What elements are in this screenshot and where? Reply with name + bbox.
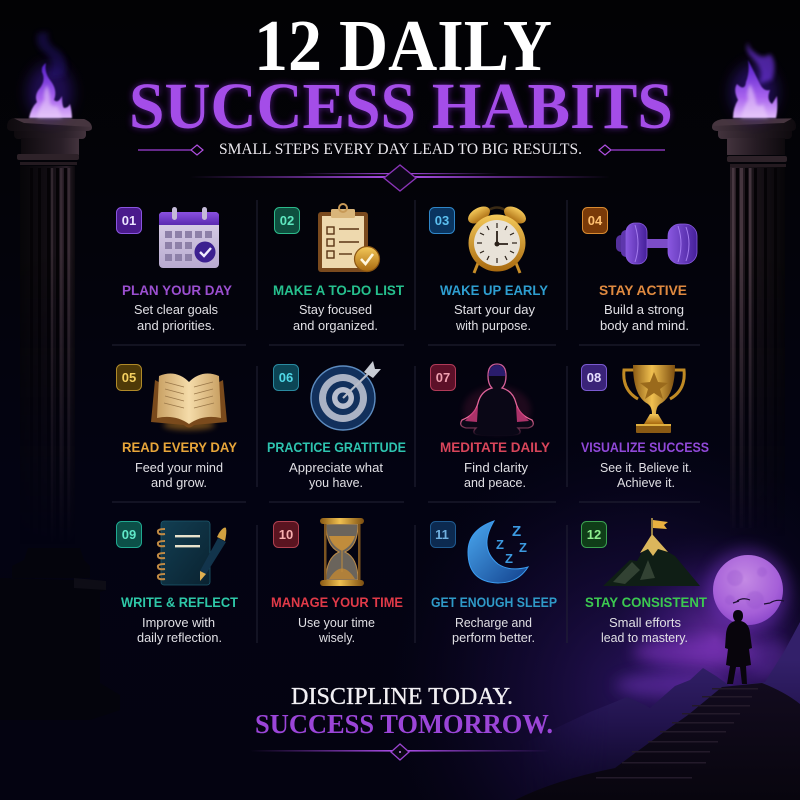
panel: habit 03 wake up early (430, 203, 548, 333)
text block (134, 303, 218, 333)
right pillar with purple flame (712, 42, 796, 536)
panel: habit 01 plan your day: 01 (122, 213, 136, 228)
text block: and grow. (151, 476, 207, 490)
text block: Appreciate what (289, 461, 384, 475)
text block (600, 461, 692, 490)
text block (289, 461, 384, 490)
text block: lead to mastery. (601, 631, 688, 645)
icon: hourglass (320, 518, 364, 586)
heading: GET ENOUGH SLEEP (431, 595, 557, 610)
title: SUCCESS HABITS (129, 70, 673, 143)
heading: WRITE & REFLECT (121, 595, 239, 610)
text block: perform better. (452, 631, 535, 645)
text block: See it. Believe it. (600, 461, 692, 475)
panel: habit 12 stay consistent (582, 518, 708, 645)
text block: Improve with (142, 616, 215, 630)
tagline with ornaments: SMALL STEPS EVERY DAY LEAD TO BIG RESULTS. (219, 141, 582, 158)
title: SUCCESS HABITS (129, 70, 673, 143)
heading: PLAN YOUR DAY (122, 283, 232, 298)
panel: habit 07 meditate daily (430, 364, 550, 490)
icon: crescent moon with Zs: Z (496, 537, 504, 552)
text block: Find clarity (464, 461, 529, 475)
title (129, 6, 673, 143)
text block: daily reflection. (137, 631, 222, 645)
panel: habit 11 get enough sleep (430, 521, 557, 645)
icon: meditating figure (461, 364, 533, 436)
heading: STAY CONSISTENT (585, 595, 708, 610)
text block: Use your time (298, 616, 375, 630)
panel: habit 09 write and reflect: 09 (122, 527, 136, 542)
heading: MEDITATE DAILY (440, 440, 550, 455)
heading: MAKE A TO-DO LIST (273, 283, 405, 298)
text block: Stay focused (299, 303, 372, 317)
text block (298, 616, 375, 645)
icon: calendar (159, 207, 219, 268)
panel: habit 06 practice gratitude (267, 361, 406, 490)
footer ornament diamond (250, 744, 550, 760)
title: 12 DAILY (254, 6, 552, 87)
text block: Small efforts (609, 616, 681, 630)
icon: crescent moon with Zs (468, 521, 528, 583)
panel: habit 08 visualize success: 08 (587, 370, 601, 385)
panel: habit 08 visualize success (581, 364, 709, 490)
panel: habit 10 manage your time (271, 518, 403, 645)
panel: habit 01 plan your day (116, 207, 232, 333)
panel: habit 09 write and reflect (116, 521, 239, 645)
text block: and peace. (464, 476, 526, 490)
panel: habit 11 get enough sleep: 11 (435, 527, 449, 542)
left pillar with purple flame (0, 32, 120, 720)
icon: target with arrow (311, 361, 381, 430)
text block: body and mind. (600, 319, 689, 333)
text block (464, 461, 529, 490)
text block: with purpose. (455, 319, 531, 333)
panel: habit 04 stay active: 04 (588, 213, 603, 228)
text block (600, 303, 689, 333)
text block: Recharge and (455, 616, 532, 630)
panel: habit 03 wake up early: 03 (435, 213, 449, 228)
heading: WAKE UP EARLY (440, 283, 548, 298)
panel: habit 10 manage your time: 10 (279, 527, 293, 542)
icon: clipboard (318, 204, 380, 272)
heading: STAY ACTIVE (599, 283, 687, 298)
grid dividers (112, 200, 700, 643)
text block (452, 616, 535, 645)
panel: habit 12 stay consistent: 12 (587, 527, 601, 542)
panel: habit 06 practice gratitude: 06 (279, 370, 293, 385)
icon: open book (151, 374, 227, 430)
text block: wisely. (318, 631, 355, 645)
icon: alarm clock (465, 203, 529, 273)
header ornament diamond (190, 165, 610, 191)
closing slogan: DISCIPLINE TODAY. (291, 684, 513, 710)
text block (454, 303, 536, 333)
text block (135, 461, 223, 490)
icon: crescent moon with Zs: Z (505, 551, 513, 566)
panel: habit 02 make a to-do list (273, 204, 405, 333)
icon: mountain with flag (603, 518, 700, 586)
text block: you have. (309, 476, 363, 490)
text block: and organized. (293, 319, 378, 333)
icon: notebook and pen (158, 521, 226, 585)
heading: VISUALIZE SUCCESS (581, 440, 709, 455)
text block: Set clear goals (134, 303, 218, 317)
text block: Start your day (454, 303, 536, 317)
panel: habit 04 stay active (582, 208, 697, 333)
icon: gold trophy (624, 365, 684, 433)
text block (137, 616, 222, 645)
icon: crescent moon with Zs: Z (512, 523, 521, 540)
text block (293, 303, 378, 333)
text block: Achieve it. (617, 476, 675, 490)
heading: MANAGE YOUR TIME (271, 595, 403, 610)
night scene: moon, mountains, stairs, figure (515, 548, 800, 800)
panel: habit 05 read every day (116, 364, 237, 490)
closing slogan (255, 684, 553, 739)
heading: READ EVERY DAY (122, 440, 237, 455)
text block: Feed your mind (135, 461, 223, 475)
text block (601, 616, 688, 645)
icon: crescent moon with Zs: Z (519, 540, 527, 555)
panel: habit 02 make a to-do list: 02 (280, 213, 294, 228)
icon: dumbbell (616, 223, 697, 264)
text block: Build a strong (604, 303, 684, 317)
heading: PRACTICE GRATITUDE (267, 440, 406, 455)
text block: and priorities. (137, 319, 215, 333)
closing slogan: SUCCESS TOMORROW. (255, 709, 553, 739)
panel: habit 07 meditate daily: 07 (436, 370, 450, 385)
panel: habit 05 read every day: 05 (122, 370, 136, 385)
